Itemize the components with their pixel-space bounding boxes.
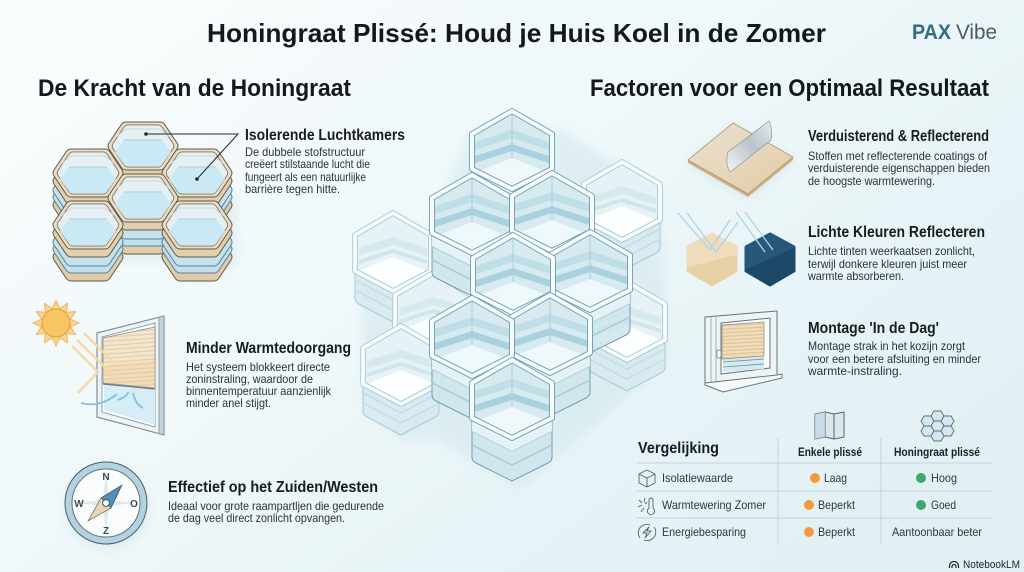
logo: PAX Vibe	[912, 21, 997, 44]
central honeycomb illustration	[355, 111, 668, 490]
column header: honingraat plissé: Honingraat plissé	[894, 445, 980, 459]
table title: Vergelijking	[638, 440, 719, 457]
icon: honeycomb air chambers	[53, 122, 238, 286]
text block: montage in de dag	[807, 320, 981, 378]
icon: sun and window with blind	[33, 300, 164, 435]
icon: reflective fabric	[688, 121, 793, 198]
row: warmtewering zomer: Warmtewering Zomer	[662, 498, 766, 512]
text block: montage in de dag: Montage strak in het kozijn zorgt	[808, 340, 966, 353]
text block: effectief op het zuiden/westen: de dag veel direct zonlicht opvangen.	[168, 512, 345, 525]
icon: single pleat	[815, 412, 844, 439]
icon: light and dark colour hexagons	[678, 212, 795, 286]
text block: isolerende luchtkamers	[245, 127, 405, 196]
row: warmtewering zomer	[638, 498, 956, 515]
text block: effectief op het zuiden/westen: Ideaal voor grote raampartljen die gedurende	[168, 500, 384, 513]
text block: montage in de dag: warmte-instraling.	[807, 365, 902, 378]
row: energiebesparing: Aantoonbaar beter	[892, 525, 982, 539]
heading: right column: Factoren voor een Optimaal Resultaat	[590, 75, 989, 102]
text block: minder warmtedoorgang: Het systeem blokkeert directe	[186, 361, 330, 374]
row: energiebesparing	[638, 524, 982, 541]
text block: effectief op het zuiden/westen: Effectief op het Zuiden/Westen	[168, 479, 378, 496]
icon: compass: W	[74, 499, 84, 510]
text block: lichte kleuren reflecteren: Lichte tinten weerkaatsen zonlicht,	[808, 245, 975, 258]
icon: compass: Z	[103, 526, 109, 537]
text block: minder warmtedoorgang	[186, 340, 351, 410]
text block: minder warmtedoorgang: binnentemperatuur aanzienlijk	[186, 385, 331, 398]
text block: minder warmtedoorgang: zoninstraling, waardoor de	[186, 373, 313, 386]
text block: minder warmtedoorgang: Minder Warmtedoorgang	[186, 340, 351, 357]
text block: lichte kleuren reflecteren: Lichte Kleuren Reflecteren	[808, 224, 985, 241]
text block: verduisterend en reflecterend: Stoffen met reflecterende coatings of	[808, 150, 988, 163]
panel: de kracht van de honingraat	[33, 75, 405, 549]
column header: enkele plissé: Enkele plissé	[798, 445, 862, 459]
icon: compass: N	[102, 472, 110, 483]
text block: isolerende luchtkamers: De dubbele stofstructuur	[245, 146, 365, 159]
row: warmtewering zomer: Beperkt	[818, 498, 856, 512]
heading: left column: De Kracht van de Honingraat	[38, 75, 351, 102]
row: warmtewering zomer: Goed	[931, 498, 956, 512]
text block: verduisterend en reflecterend: verduisterende eigenschappen bieden	[808, 162, 990, 175]
text block: lichte kleuren reflecteren	[807, 224, 985, 283]
comparison table	[637, 411, 993, 545]
text block: lichte kleuren reflecteren: terwijl donkere kleuren juist meer	[808, 258, 967, 271]
text block: montage in de dag: Montage 'In de Dag'	[808, 320, 939, 337]
row: isolatiewaarde	[639, 470, 957, 487]
row: isolatiewaarde: Isolatiewaarde	[662, 471, 733, 485]
text block: montage in de dag: voor een betere afsluiting en minder	[808, 353, 981, 366]
icon: honeycomb cells	[921, 411, 954, 441]
logo: PAX Vibe: Vibe	[956, 21, 997, 44]
text block: isolerende luchtkamers: fungeert als een natuurlijke	[245, 171, 366, 184]
icon: compass	[65, 462, 149, 549]
text block: isolerende luchtkamers: Isolerende Luchtkamers	[245, 127, 405, 144]
text block: minder warmtedoorgang: minder anel stijgt.	[186, 397, 271, 410]
text block: verduisterend en reflecterend	[808, 128, 990, 188]
row: isolatiewaarde: Hoog	[931, 471, 957, 485]
text block: effectief op het zuiden/westen	[168, 479, 384, 525]
footer: notebooklm mark: NotebookLM	[963, 559, 1020, 571]
text block: isolerende luchtkamers: barrière tegen hitte.	[245, 183, 340, 196]
title: Honingraat Plissé: Houd je Huis Koel in de Zomer	[207, 18, 826, 48]
panel: factoren voor een optimaal resultaat	[590, 75, 993, 545]
row: energiebesparing: Energiebesparing	[662, 525, 746, 539]
icon: compass: O	[130, 499, 138, 510]
logo: PAX Vibe: PAX	[912, 21, 951, 44]
row: energiebesparing: Beperkt	[818, 525, 856, 539]
text block: verduisterend en reflecterend: de hoogste warmtewering.	[808, 175, 935, 188]
icon: window with recessed blind	[705, 311, 782, 392]
text block: isolerende luchtkamers: creëert stilstaande lucht die	[245, 158, 370, 171]
row: isolatiewaarde: Laag	[824, 471, 847, 485]
text block: lichte kleuren reflecteren: warmte absorberen.	[807, 270, 904, 283]
text block: verduisterend en reflecterend: Verduisterend & Reflecterend	[808, 128, 989, 145]
